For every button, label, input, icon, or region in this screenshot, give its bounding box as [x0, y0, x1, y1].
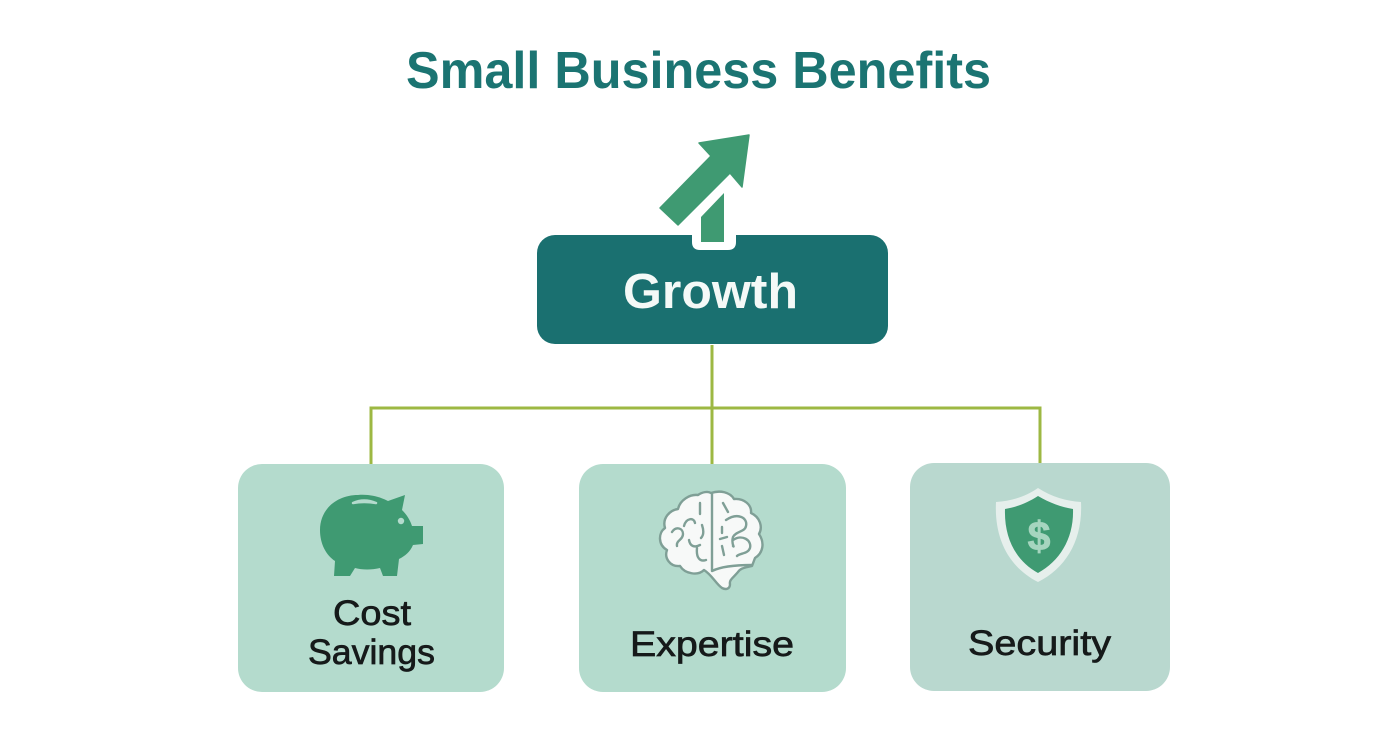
cost savings label: Cost [333, 594, 411, 633]
icon: brain [660, 492, 762, 589]
security card [910, 463, 1170, 691]
expertise card [579, 464, 846, 692]
connector lines [371, 345, 1040, 464]
security label: Security [968, 624, 1112, 663]
panel: security [910, 463, 1170, 691]
icon: growth arrow [660, 135, 749, 250]
title: Small Business Benefits [406, 42, 991, 100]
icon: shield: $ [1028, 513, 1051, 559]
panel: expertise [579, 464, 846, 692]
expertise label: Expertise [630, 625, 794, 664]
growth label: Growth [623, 265, 798, 319]
panel: growth [537, 135, 888, 344]
panel: cost savings [238, 464, 504, 692]
growth box [537, 235, 888, 344]
icon: shield [996, 488, 1081, 582]
cost savings card [238, 464, 504, 692]
cost savings label [308, 594, 435, 672]
icon: piggy bank [320, 495, 423, 576]
cost savings label: Savings [308, 633, 435, 672]
